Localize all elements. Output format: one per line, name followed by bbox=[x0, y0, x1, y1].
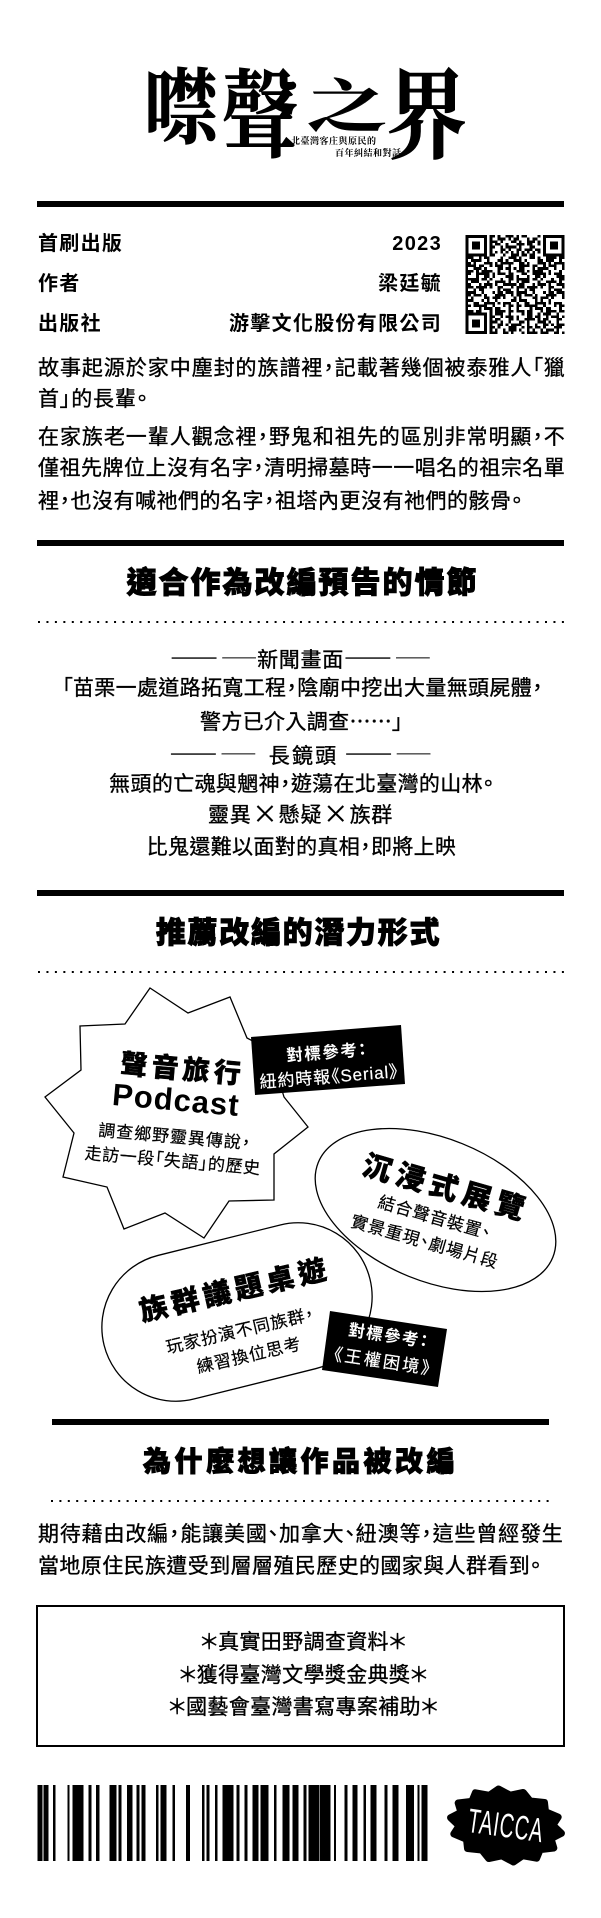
podcast description: 調查鄉野靈異傳說， bbox=[97, 1121, 252, 1153]
ellipse: immersive exhibition bbox=[291, 1096, 580, 1324]
author name: 梁廷毓 bbox=[378, 273, 442, 295]
heading: recommended adaptation forms: 推薦改編的潛力形式 bbox=[156, 917, 441, 950]
callout: tabletop reference: 《王權困境》 bbox=[332, 1345, 434, 1379]
panel: adaptation forms diagram bbox=[44, 987, 556, 1402]
text block: trailer plot: 比鬼還難以面對的真相，即將上映 bbox=[147, 836, 456, 859]
title character 1: 噤 bbox=[144, 43, 218, 161]
subheading: long shot: ———— 長鏡頭 ———— bbox=[169, 735, 432, 770]
panel: highlights box: ＊獲得臺灣文學獎金典獎＊ bbox=[179, 1659, 428, 1689]
text block: trailer plot: 「苗栗一處道路拓寬工程，陰廟中挖出大量無頭屍體， bbox=[62, 677, 543, 700]
exhibition title: 沉浸式展覽 bbox=[359, 1149, 534, 1228]
heading: plot for adaptation trailer: 適合作為改編預告的情節 bbox=[126, 567, 478, 600]
podcast word: Podcast bbox=[111, 1077, 241, 1123]
heading: why adapt: 為什麼想讓作品被改編 bbox=[143, 1446, 458, 1477]
icon: barcode bbox=[38, 1785, 428, 1861]
icon: TAICCA logo: TAICCA bbox=[466, 1801, 546, 1850]
podcast title: 聲音旅行 bbox=[119, 1048, 246, 1090]
text block: reason for adaptation: 期待藉由改編，能讓美國、加拿大、紐澳等，這些曾經發生 bbox=[38, 1523, 563, 1546]
text block: story intro: 在家族老一輩人觀念裡，野鬼和祖先的區別非常明顯，不 bbox=[38, 426, 565, 449]
title character 2: 聲 bbox=[222, 40, 298, 176]
author label: 作者 bbox=[38, 273, 81, 295]
icon: QR code bbox=[466, 235, 564, 334]
first edition label: 首刷出版 bbox=[38, 233, 123, 255]
game description: 玩家扮演不同族群， bbox=[164, 1305, 316, 1357]
callout: Serial reference bbox=[251, 1025, 405, 1095]
subheading: news footage: ————新聞畫面———— bbox=[170, 639, 431, 674]
callout: tabletop reference: 對標參考： bbox=[347, 1320, 431, 1351]
text block: trailer plot: 警方已介入調查……」 bbox=[200, 706, 403, 736]
text block: story intro: 僅祖先牌位上沒有名字，清明掃墓時一一唱名的祖宗名單 bbox=[38, 457, 565, 480]
title character 4: 界 bbox=[387, 38, 467, 179]
title character 3: 之 bbox=[307, 60, 387, 143]
pill: tabletop game: 練習換位思考 bbox=[195, 1334, 303, 1377]
publisher name: 游擊文化股份有限公司 bbox=[229, 313, 442, 335]
panel: book metadata bbox=[38, 232, 442, 335]
text block: trailer plot bbox=[62, 639, 543, 859]
starburst: podcast bbox=[45, 988, 308, 1238]
panel: highlights box bbox=[36, 1605, 565, 1747]
callout: Serial reference: 對標參考： bbox=[286, 1039, 369, 1065]
first edition year: 2023 bbox=[392, 233, 442, 255]
game title: 族群議題桌遊 bbox=[136, 1252, 333, 1327]
panel: highlights box: ＊國藝會臺灣書寫專案補助＊ bbox=[168, 1691, 438, 1721]
text block: story intro: 裡，也沒有喊祂們的名字，祖塔內更沒有祂們的骸骨。 bbox=[38, 490, 522, 513]
text block: story intro bbox=[38, 356, 565, 513]
text block: story intro: 故事起源於家中塵封的族譜裡，記載著幾個被泰雅人「獵 bbox=[38, 357, 565, 380]
title: book name bbox=[144, 38, 467, 179]
text block: trailer plot: 無頭的亡魂與魍神，遊蕩在北臺灣的山林。 bbox=[109, 773, 494, 796]
text block: trailer plot: 靈異×懸疑×族群 bbox=[208, 795, 393, 831]
callout: tabletop reference bbox=[322, 1311, 447, 1387]
subtitle: 北臺灣客庄與原民的 bbox=[291, 134, 377, 147]
panel: highlights box: ＊真實田野調查資料＊ bbox=[201, 1626, 406, 1656]
pill: tabletop game bbox=[86, 1207, 388, 1417]
text block: story intro: 首」的長輩。 bbox=[38, 388, 148, 411]
starburst: podcast: 走訪一段「失語」的歷史 bbox=[84, 1144, 261, 1178]
text block: reason for adaptation bbox=[38, 1522, 563, 1578]
icon: TAICCA logo bbox=[447, 1786, 565, 1866]
exhibition description: 結合聲音裝置、 bbox=[376, 1193, 493, 1243]
ellipse: immersive exhibition: 實景重現、劇場片段 bbox=[349, 1212, 501, 1272]
subtitle bbox=[291, 134, 402, 159]
subtitle: 百年糾結和對話 bbox=[335, 146, 402, 159]
text block: reason for adaptation: 當地原住民族遭受到層層殖民歷史的國家與人群看到。 bbox=[38, 1555, 541, 1578]
publisher label: 出版社 bbox=[38, 313, 102, 335]
callout: Serial reference: 紐約時報《Serial》 bbox=[259, 1062, 399, 1092]
